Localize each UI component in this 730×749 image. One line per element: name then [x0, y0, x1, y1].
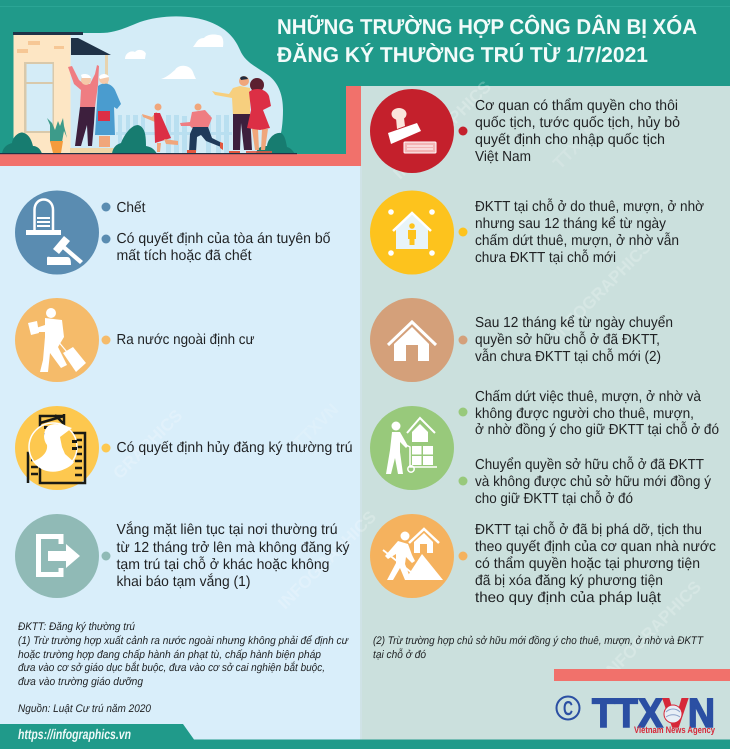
copyright symbol: C [563, 698, 573, 720]
item: death or declared missing [15, 190, 330, 274]
text: Có quyết định hủy đăng ký thường trú [116, 440, 352, 456]
url: https://infographics.vn [18, 726, 131, 742]
bullet [458, 228, 468, 236]
father [212, 76, 252, 154]
logo: TTXVN [556, 690, 716, 736]
ground line [0, 153, 297, 154]
panel: right background [361, 86, 730, 740]
clouds [125, 34, 223, 79]
grandfather waving [68, 65, 99, 146]
bullet [102, 444, 110, 452]
icon: house with person [370, 190, 454, 274]
text: ở nhờ đồng ý cho giữ ĐKTT tại chỗ ở đó [475, 421, 719, 438]
watermark [109, 77, 705, 683]
girl running [142, 104, 178, 152]
header background [0, 0, 730, 166]
text: tạm trú tại chỗ ở khác hoặc không [116, 556, 330, 573]
footnotes left: đưa vào cơ sở giáo dục bắt buộc, đưa vào cơ sở cai nghiện bắt buộc, [18, 661, 325, 674]
text: vẫn chưa ĐKTT tại chỗ mới (2) [475, 348, 661, 365]
text: Cơ quan có thẩm quyền cho thôi [475, 98, 678, 114]
icon: stamp [370, 89, 454, 173]
watermark: INFOGRAPHICS [274, 507, 380, 613]
text: khai báo tạm vắng (1) [116, 573, 250, 590]
text: theo quyết định của cơ quan nhà nước [475, 539, 716, 555]
wordmark: TTXVN [592, 690, 715, 736]
text: đã bị xóa đăng ký phương tiện [475, 573, 663, 589]
text: và không được chủ sở hữu mới đồng ý [475, 474, 712, 490]
watermark: INFOGRAPHICS [389, 77, 495, 183]
text [475, 98, 680, 165]
text: Chết [116, 200, 146, 216]
title: ĐĂNG KÝ THƯỜNG TRÚ TỪ 1/7/2021 [277, 42, 648, 67]
footer band [0, 724, 730, 749]
fence [116, 115, 232, 153]
illustration: family and house [0, 16, 297, 154]
footnote right [373, 635, 704, 661]
item: decision to cancel registration [15, 406, 352, 490]
icon: house [370, 298, 454, 382]
text: Chuyển quyền sở hữu chỗ ở đã ĐKTT [475, 456, 704, 473]
text: mất tích hoặc đã chết [116, 248, 252, 264]
sky blob [70, 16, 283, 154]
text: Việt Nam [475, 149, 531, 165]
icon: person moving boxes [370, 406, 454, 490]
item: ownership transferred [370, 298, 673, 382]
text: có thẩm quyền hoặc tại phương tiện [475, 556, 700, 572]
bullet [458, 552, 468, 560]
bullets [458, 408, 468, 486]
text: chưa ĐKTT tại chỗ mới [475, 249, 616, 266]
icon: exit door [15, 514, 99, 598]
text: chấm dứt thuê, mượn, ở nhờ vẫn [475, 232, 679, 249]
item: continuous absence [15, 514, 350, 598]
text [475, 315, 673, 365]
text: quyết định cho nhập quốc tịch [475, 132, 665, 148]
text: Sau 12 tháng kể từ ngày chuyển [475, 315, 673, 331]
title: NHỮNG TRƯỜNG HỢP CÔNG DÂN BỊ XÓA [277, 14, 697, 39]
text: quyền sở hữu chỗ ở đã ĐKTT, [475, 331, 660, 348]
footnote right: tại chỗ ở đó [373, 648, 426, 661]
footnotes left: ĐKTT: Đăng ký thường trú [18, 621, 135, 633]
text: Vắng mặt liên tục tại nơi thường trú [116, 521, 338, 538]
footer band with url tab [0, 724, 730, 749]
globe [664, 705, 682, 723]
boy running [180, 104, 223, 154]
text: quốc tịch, tước quốc tịch, hủy bỏ [475, 115, 680, 131]
footnotes left [18, 621, 349, 715]
text [475, 389, 719, 507]
title [277, 14, 697, 67]
icon: worker shovelling and house [370, 514, 454, 598]
potted plant [47, 118, 67, 153]
house [13, 32, 123, 154]
watermark: INFOGRAPHICS [599, 577, 705, 683]
text: cho giữ ĐKTT tại chỗ ở đó [475, 490, 633, 507]
footnotes left: Nguồn: Luật Cư trú năm 2020 [18, 703, 152, 715]
grandmother with handbag [95, 74, 121, 147]
footnotes left: hoặc trường hợp đang chấp hành án phạt tù, chấp hành biện pháp [18, 649, 321, 661]
footnote right: (2) Trừ trường hợp chủ sở hữu mới đồng ý cho thuê, mượn, ở nhờ và ĐKTT [373, 635, 704, 647]
item: rented residence [370, 190, 704, 274]
text [475, 521, 716, 606]
item: lease ended or no consent [370, 389, 719, 507]
bullet [458, 336, 468, 344]
text: từ 12 tháng trở lên mà không đăng ký [116, 540, 350, 556]
bullet [458, 126, 468, 136]
item: nationality revoked [370, 89, 680, 173]
icon: buildings and person [15, 406, 99, 490]
text [116, 200, 330, 264]
bushes [2, 125, 295, 154]
bullets [102, 202, 110, 244]
watermark: INFOGRAPHICS [549, 237, 655, 343]
text: Có quyết định của tòa án tuyên bố [116, 231, 330, 247]
footnotes left: đưa vào trường giáo dưỡng [18, 676, 144, 688]
mother [246, 78, 272, 154]
salmon ribbon [0, 86, 361, 166]
text [116, 521, 350, 590]
footnotes left: (1) Trừ trường hợp xuất cảnh ra nước ngoài nhưng không phải để định cư [18, 635, 349, 647]
icon: tombstone and gavel [15, 190, 99, 274]
icon: traveller with suitcase [15, 298, 99, 382]
text: Chấm dứt việc thuê, mượn, ở nhờ và [475, 389, 702, 405]
watermark: TTXVN [549, 120, 602, 173]
item: demolished or confiscated [370, 514, 716, 606]
text: theo quy định của pháp luật [475, 590, 661, 606]
salmon bar bottom right [554, 669, 730, 681]
text: không được người cho thuê, mượn, [475, 406, 694, 422]
watermark: GRAPHICS [109, 406, 186, 483]
text: nhưng sau 12 tháng kể từ ngày [475, 216, 667, 232]
text [475, 198, 704, 266]
text: ĐKTT tại chỗ ở do thuê, mượn, ở nhờ [475, 198, 704, 215]
text: Ra nước ngoài định cư [116, 332, 255, 348]
text: ĐKTT tại chỗ ở đã bị phá dỡ, tịch thu [475, 521, 702, 538]
bullet [102, 552, 110, 560]
bullet [102, 336, 110, 344]
panel: left background [0, 166, 361, 740]
item: emigrating [15, 298, 255, 382]
copyright symbol [556, 696, 580, 720]
watermark: TTXVN [289, 400, 342, 453]
